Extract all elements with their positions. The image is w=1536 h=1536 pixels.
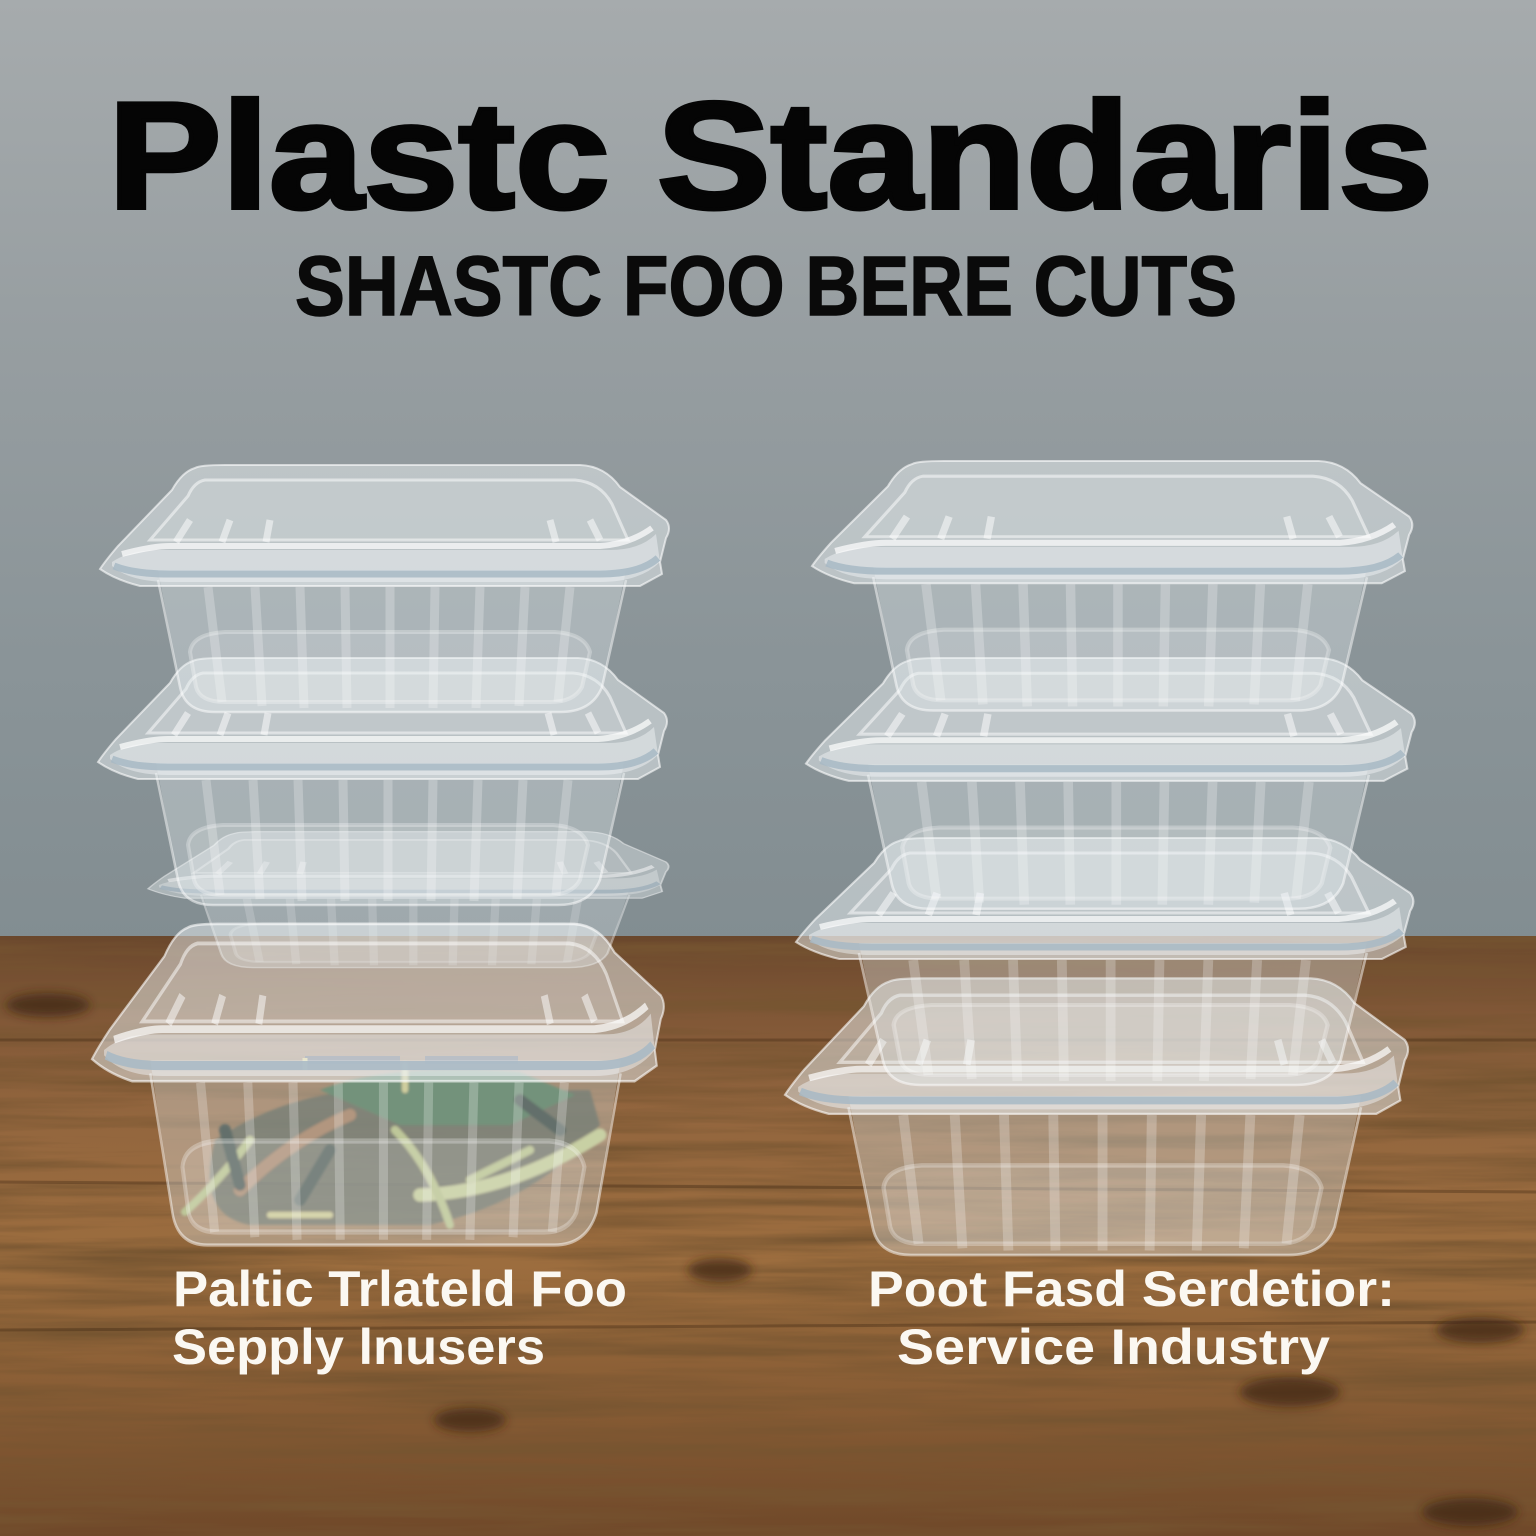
top container [812, 461, 1412, 710]
third container [796, 838, 1413, 1085]
right caption: Poot Fasd Serdetior: [868, 1261, 1395, 1317]
left caption: Sepply lnusers [172, 1319, 545, 1375]
partly hidden container [148, 832, 669, 968]
food contents [185, 1065, 600, 1225]
container clips [305, 1058, 518, 1070]
left caption: Paltic Trlateld Foo [173, 1261, 627, 1317]
left container stack [92, 465, 669, 1245]
subtitle: SHASTC FOO BERE CUTS [295, 239, 1237, 333]
background wall [0, 0, 1536, 945]
right caption [868, 1261, 1395, 1375]
wooden table [0, 936, 1536, 1536]
left caption [172, 1261, 627, 1375]
bottom container [785, 978, 1408, 1255]
second container [806, 658, 1415, 909]
right container stack [785, 461, 1415, 1255]
top container [100, 465, 669, 712]
middle container [98, 658, 667, 905]
bottom container with food [92, 924, 664, 1245]
title: Plastc Standaris [108, 71, 1433, 241]
right caption: Service Industry [897, 1319, 1330, 1375]
